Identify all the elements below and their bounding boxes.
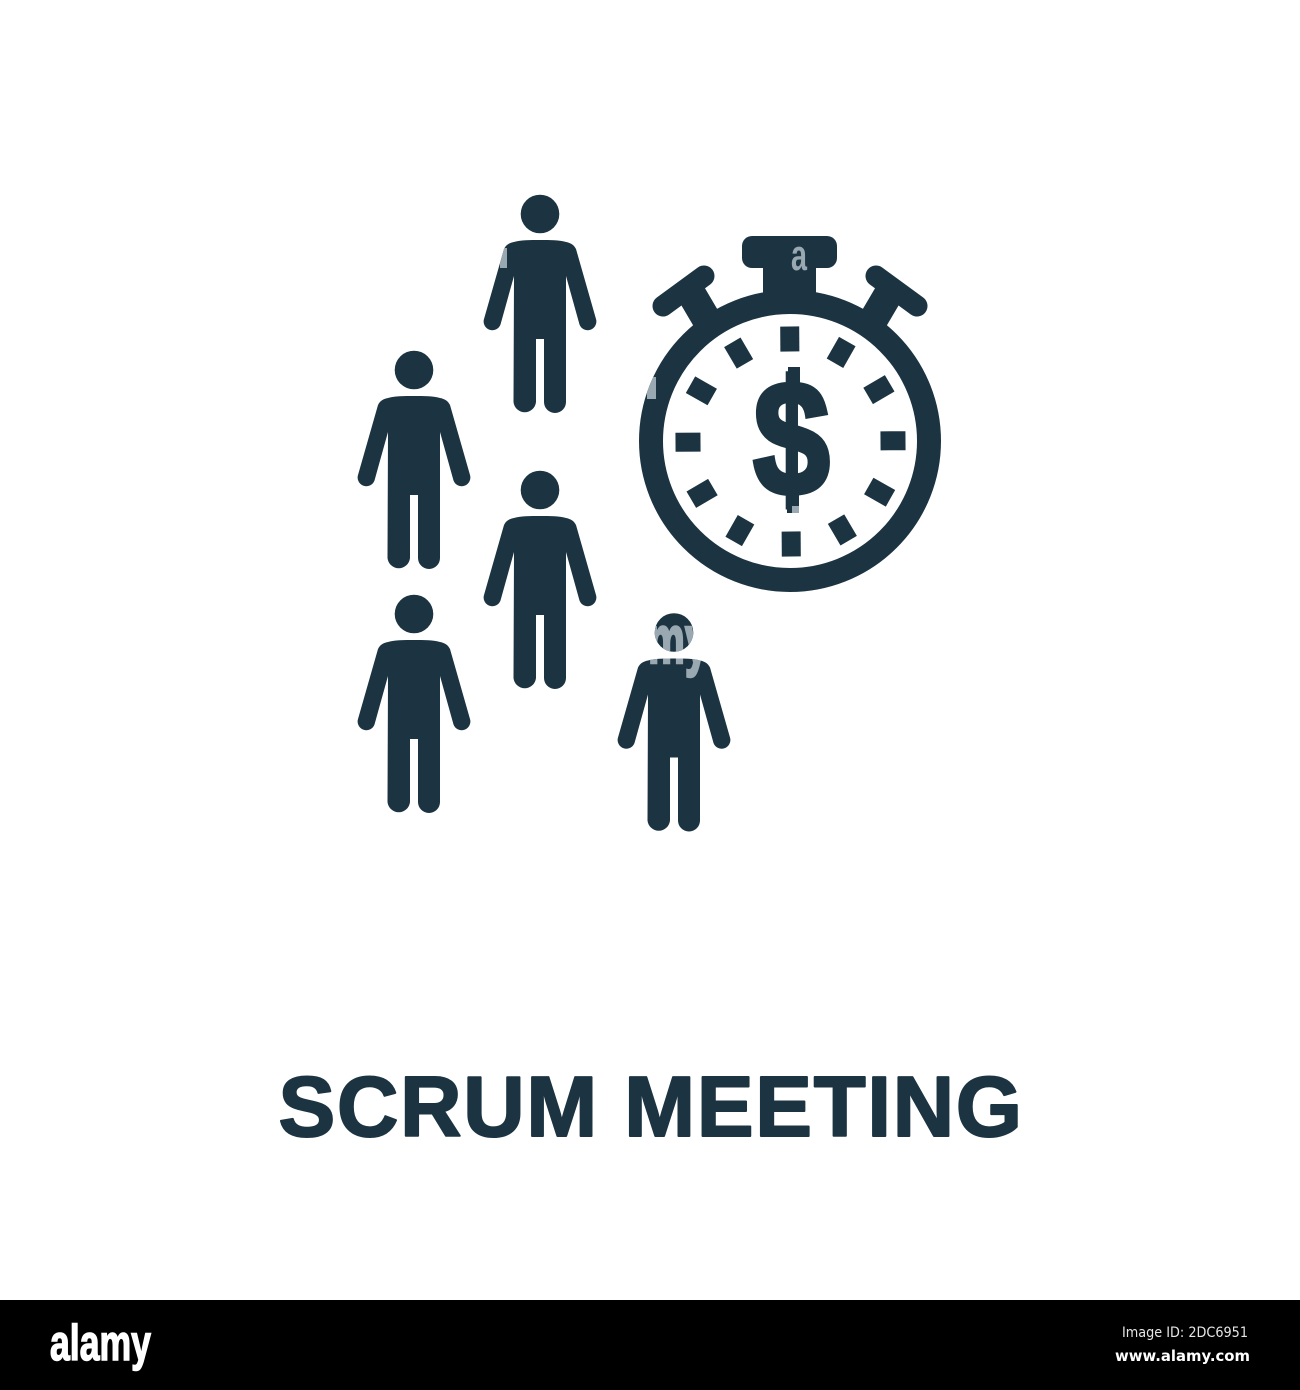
- dial tick marks: [675, 326, 906, 557]
- website: www.alamy.com: [1115, 1347, 1250, 1365]
- person top: [484, 195, 596, 413]
- watermark: patch on top person shoulder: [500, 248, 507, 268]
- person lower right: [618, 613, 730, 832]
- group of people: [358, 195, 730, 831]
- watermark: patch on dollar stem: [792, 506, 799, 513]
- stopwatch ring: [651, 302, 929, 580]
- top crown button: [742, 236, 837, 308]
- dollar stem ends: [787, 367, 800, 513]
- right side button: [872, 276, 917, 322]
- watermark: letter on crown: a: [791, 231, 807, 280]
- image id: Image ID: 2DC6951: [1122, 1325, 1248, 1341]
- person lower left: [358, 595, 470, 813]
- person upper left: [358, 351, 470, 569]
- dollar sign: $: [754, 348, 829, 529]
- left side button: [663, 276, 708, 322]
- watermark: patch on stopwatch ring: [647, 377, 656, 399]
- icon: stopwatch with dollar sign: [651, 236, 929, 580]
- title: SCRUM MEETING: [278, 1060, 1024, 1155]
- watermark: letters on lower right person: my: [648, 602, 708, 678]
- watermark fragments over the icons: [500, 231, 807, 678]
- footer logo: alamy: [50, 1315, 151, 1371]
- person centre: [484, 471, 596, 689]
- footer bar: [0, 1300, 1300, 1390]
